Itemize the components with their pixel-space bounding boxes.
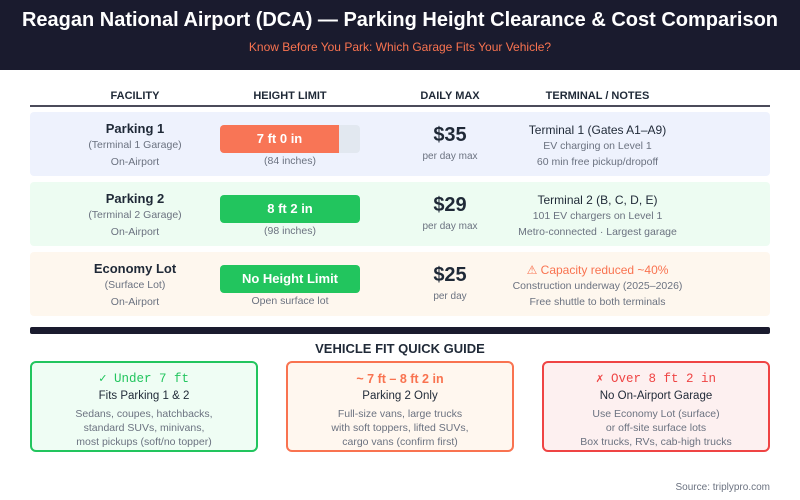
row: Parking 1: $35 (433, 124, 467, 146)
row: Parking 1 (30, 112, 770, 176)
table header: TERMINAL / NOTES (546, 90, 649, 102)
card: under 7 ft: ✓ Under 7 ft (99, 372, 189, 386)
row: Parking 2: Metro-connected · Largest garage (518, 226, 677, 238)
row: Parking 1: 7 ft 0 in (257, 131, 302, 146)
row: Parking 1: Terminal 1 (Gates A1–A9) (529, 123, 666, 137)
card: over 8 ft 2 in: Box trucks, RVs, cab-high trucks (580, 436, 732, 448)
table header: HEIGHT LIMIT (253, 90, 327, 102)
card: over 8 ft 2 in (542, 361, 770, 452)
row: Parking 1: 60 min free pickup/dropoff (537, 156, 658, 168)
row: Parking 2: 101 EV chargers on Level 1 (533, 210, 662, 222)
card: under 7 ft: Sedans, coupes, hatchbacks, (75, 408, 213, 420)
row: Economy Lot: Free shuttle to both terminals (530, 296, 665, 308)
row: Economy Lot: Economy Lot (94, 261, 176, 276)
row: Parking 1: per day max (422, 151, 478, 162)
table header: DAILY MAX (420, 90, 480, 102)
row: Parking 2: per day max (422, 221, 478, 232)
row: Parking 1: (84 inches) (264, 155, 316, 167)
card: over 8 ft 2 in: or off-site surface lots (606, 422, 706, 434)
header (0, 0, 800, 70)
row: Economy Lot: per day (433, 291, 467, 302)
row: Parking 2: 8 ft 2 in (267, 201, 313, 216)
row: Economy Lot: (Surface Lot) (105, 279, 165, 291)
subtitle: Know Before You Park: Which Garage Fits Your Vehicle? (249, 40, 551, 54)
row: Economy Lot: No Height Limit (242, 271, 338, 286)
row: Economy Lot: $25 (433, 264, 467, 286)
card: under 7 ft: standard SUVs, minivans, (84, 422, 204, 434)
row: Economy Lot: On-Airport (111, 296, 159, 308)
card: 7 ft to 8 ft 2 in: Parking 2 Only (362, 390, 438, 402)
card: 7 ft to 8 ft 2 in: cargo vans (confirm first) (342, 436, 458, 448)
source: Source: triplypro.com (676, 482, 770, 493)
row: Parking 1: On-Airport (111, 156, 159, 168)
card: 7 ft to 8 ft 2 in: ~ 7 ft – 8 ft 2 in (356, 372, 444, 386)
card: over 8 ft 2 in: No On-Airport Garage (600, 390, 712, 402)
card: under 7 ft (30, 361, 258, 452)
row: Parking 2: On-Airport (111, 226, 159, 238)
row: Parking 1: (Terminal 1 Garage) (88, 139, 182, 151)
row: Economy Lot: ⚠ Capacity reduced ~40% (527, 263, 668, 277)
card: under 7 ft: Fits Parking 1 & 2 (99, 390, 189, 402)
table header (30, 90, 770, 107)
card: 7 ft to 8 ft 2 in: with soft toppers, lifted SUVs, (331, 422, 469, 434)
row: Parking 2 (30, 182, 770, 246)
row: Parking 2: (98 inches) (264, 225, 316, 237)
card: under 7 ft: most pickups (soft/no topper) (76, 436, 212, 448)
card: over 8 ft 2 in: ✗ Over 8 ft 2 in (596, 372, 716, 386)
row: Parking 2: (Terminal 2 Garage) (88, 209, 182, 221)
row: Parking 1: EV charging on Level 1 (543, 140, 652, 152)
row: Parking 2: Terminal 2 (B, C, D, E) (537, 193, 658, 207)
row: Parking 1: Parking 1 (106, 121, 164, 136)
table header: FACILITY (111, 90, 159, 102)
row: Economy Lot: Open surface lot (251, 295, 329, 307)
guide heading: VEHICLE FIT QUICK GUIDE (315, 341, 485, 356)
card: 7 ft to 8 ft 2 in (286, 361, 514, 452)
row: Economy Lot: Construction underway (2025–2026) (513, 280, 682, 292)
card: over 8 ft 2 in: Use Economy Lot (surface) (592, 408, 720, 420)
title: Reagan National Airport (DCA) — Parking Height Clearance & Cost Comparison (22, 9, 778, 31)
row: Parking 2: $29 (433, 194, 467, 216)
row: Economy Lot (30, 252, 770, 316)
row: Parking 2: Parking 2 (106, 191, 164, 206)
card: 7 ft to 8 ft 2 in: Full-size vans, large trucks (338, 408, 462, 420)
